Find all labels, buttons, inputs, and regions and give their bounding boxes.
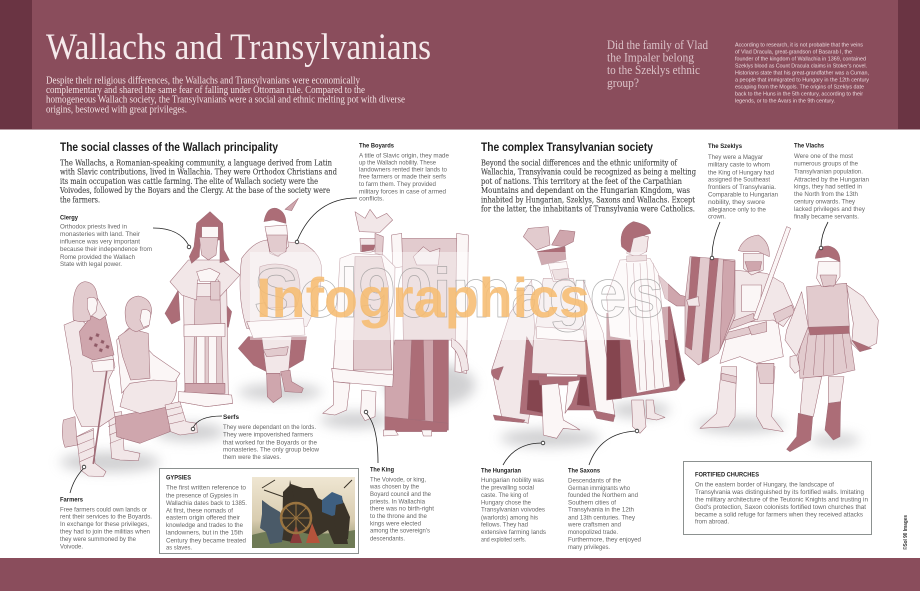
label: The King: descendants. <box>370 535 405 542</box>
label: The Szeklys: allegiance only to the <box>708 206 766 213</box>
Transylvanian paragraph: pot of nations. This territory at the feet of the Carpathian <box>481 176 682 186</box>
label: Clergy: State with legal power. <box>60 261 122 268</box>
Wallach paragraph: with Slavic contributions, lived in Wallachia. They were Orthodox Christians and <box>60 166 338 176</box>
label: The Vlachs: finally became servants. <box>794 213 859 220</box>
question: to the Szeklys ethnic <box>607 62 700 77</box>
Gypsies engraving <box>252 477 355 548</box>
label: Serfs: They were impoverished farmers <box>223 432 313 439</box>
leader: King <box>364 410 378 463</box>
leader: Hungarian <box>503 441 545 465</box>
label: The Saxons: many privileges. <box>568 544 610 551</box>
answer text: a people that immigrated to Hungary in the 12th century <box>735 78 869 84</box>
panel: Transylvanian heading: The complex Transylvanian society <box>481 140 653 154</box>
label: Farmers: Farmers <box>60 497 83 504</box>
header band <box>0 0 920 130</box>
label: The Boyards: A title of Slavic origin, they made <box>359 152 449 159</box>
intro text: origins, bestowed with great privileges. <box>46 104 187 115</box>
Transylvanian paragraph: for the latter, the inhabitants of Transylvania were Catholics. <box>481 204 695 214</box>
label: Serfs <box>223 414 319 461</box>
label: The Saxons: monopolized trade. <box>568 529 618 536</box>
label: The Saxons: Transylvania in the 12th <box>568 507 634 514</box>
label: The Boyards: up the Wallach nobility. These <box>359 159 436 166</box>
label: The Boyards: to farm them. They provided <box>359 181 436 188</box>
label: The Hungarian: fellows. They had <box>481 522 528 529</box>
label: The Boyards: conflicts. <box>359 196 384 203</box>
label: The Szeklys: Comparable to Hungarian <box>708 192 778 199</box>
figure: bishop <box>165 212 240 407</box>
Fortified churches text: Transylvania was distinguished by its fortified walls. Imitating <box>695 489 864 496</box>
label: Farmers <box>60 497 152 550</box>
Fortified churches text <box>695 481 868 525</box>
Wallach paragraph: the farmers. <box>60 194 100 204</box>
Gypsies text: Century they became treated <box>166 537 246 544</box>
label: The Saxons: Descendants of the <box>568 477 621 484</box>
label: Clergy: monasteries with land. Their <box>60 231 140 238</box>
label: The Boyards <box>359 142 449 203</box>
label: The Hungarian: Transylvanian voivodes <box>481 507 545 514</box>
Transylvanian paragraph: Wallachia, Transylvania could be recognized as being a melting <box>481 166 697 176</box>
Fortified churches heading: FORTIFIED CHURCHES <box>695 471 760 478</box>
leader: Serfs <box>191 416 222 431</box>
Wallach paragraph: its main occupation was cattle farming. The elite of Wallach society were the <box>60 176 318 186</box>
label: Clergy: Clergy <box>60 214 78 222</box>
label: The Hungarian: extensive farming lands <box>481 529 546 536</box>
credit: ©Sol 90 Images <box>902 515 909 550</box>
answer text: According to research, it is not probable that the veins <box>735 42 863 48</box>
label: The Boyards: The Boyards <box>359 142 394 150</box>
intro text: complementary and shared the same fear of falling under Ottoman rule. Compared to the <box>46 85 365 96</box>
Gypsies text: landowners, but in the 15th <box>166 530 243 537</box>
label: The Boyards: landowners rented their lands to <box>359 166 447 173</box>
label: The Vlachs: kings, they had settled in <box>794 184 862 191</box>
label: The King: Boyard council and the <box>370 491 431 498</box>
label: The Saxons: Furthermore, they enjoyed <box>568 537 641 544</box>
label: The Hungarian: Hungary chose the <box>481 499 531 506</box>
figure: boyard <box>238 198 322 403</box>
ground shadows <box>60 363 860 472</box>
label: The Hungarian: the prevailing social <box>481 485 534 492</box>
label: The Szeklys: The Szeklys <box>708 143 742 150</box>
label: The Boyards: military forces in case of armed <box>359 189 446 196</box>
label: The King: among the sovereign's <box>370 528 430 535</box>
Fortified churches text: the military architecture of the Teutonic Knights and trusting in <box>695 496 868 503</box>
leader: Boyards <box>295 198 357 244</box>
leader: Saxons <box>589 429 639 465</box>
label: The Szeklys: nobility, they swore <box>708 199 766 206</box>
panel: Wallach heading: The social classes of the Wallach principality <box>60 140 278 154</box>
label: Clergy: Rome provided the Wallach <box>60 254 135 261</box>
Fortified churches text: God's protection, Saxon colonists fortified town churches that <box>695 504 866 511</box>
Fortified churches text: On the eastern border of Hungary, the landscape of <box>695 481 834 488</box>
figure: king and throne <box>323 209 468 436</box>
Gypsies text: as slaves. <box>166 545 192 552</box>
label: Farmers: they had to join the militias when <box>60 529 150 536</box>
label: Clergy: influence was very important <box>60 238 140 245</box>
question <box>607 37 708 90</box>
answer text: back to the Huns in the 5th century, according to their <box>735 92 863 98</box>
answer text: legends, or to the Avars in the 9th century. <box>735 99 835 105</box>
label: The Vlachs <box>794 143 869 220</box>
Fortified churches text: from abroad. <box>695 518 729 525</box>
leader: Farmers <box>70 465 86 493</box>
panel: Fortified churches <box>684 462 872 534</box>
label: The Vlachs: Were one of the most <box>794 153 853 160</box>
label: The Vlachs: the North from the 13th <box>794 191 858 198</box>
label: Farmers: they were summoned by the <box>60 536 136 543</box>
label: Clergy <box>60 214 152 268</box>
washed watermark strip <box>250 252 668 340</box>
label: The Szeklys: frontiers of Transylvania. <box>708 184 776 191</box>
label: The Hungarian: caste. The king of <box>481 492 528 499</box>
label: The Hungarian: (warlords) among his <box>481 514 538 521</box>
label: The Saxons: and 13th centuries. They <box>568 514 636 521</box>
Transylvanian paragraph <box>481 158 697 214</box>
answer text <box>735 42 869 105</box>
label: The Szeklys: assigned the Southeast <box>708 177 770 184</box>
label: The Saxons: founded the Northern and <box>568 492 638 499</box>
Gypsies text: Wallachia dates back to 1385. <box>166 500 247 507</box>
label: Serfs: Serfs <box>223 414 239 421</box>
footer band <box>0 558 920 591</box>
Fortified churches text: became a solid refuge for farmers when they received attacks <box>695 511 863 518</box>
label: Farmers: rent their services to the Boyards. <box>60 514 152 521</box>
answer text: Historians state that his great-grandfather was a Cuman, <box>735 70 869 76</box>
watermark: Infographics: Infographics <box>256 266 590 329</box>
figure: szekly soldier with shield <box>685 227 795 432</box>
label: Farmers: In exchange for these privileges, <box>60 521 149 528</box>
label: The King: priests. In Wallachia <box>370 498 425 505</box>
panel: Gypsies <box>160 468 358 554</box>
label: The Szeklys: crown. <box>708 214 726 221</box>
label: Farmers: Free farmers could own lands or <box>60 506 147 513</box>
question: group? <box>607 75 639 90</box>
title: Wallachs and Transylvanians <box>46 27 431 68</box>
label: The King: was chosen by the <box>369 483 419 490</box>
Transylvanian paragraph: Mountains and dependant on the Hungarian Kingdom, was <box>481 185 690 195</box>
answer text: of Vlad Dracula, great-grandson of Basarab I, the <box>735 49 852 55</box>
label: The Saxons: The Saxons <box>568 467 600 474</box>
label: The Vlachs: Attracted by the Hungarian <box>794 176 869 183</box>
label: Farmers: Voivode. <box>60 543 83 550</box>
Transylvanian paragraph: inhabited by Hungarian, Szeklys, Saxons and Wallachs. Except <box>481 194 695 204</box>
label: The King: to the throne and the <box>370 513 427 520</box>
label: Clergy: because their independence from <box>60 246 152 253</box>
label: The Szeklys <box>708 143 778 221</box>
Wallach paragraph: Voivodes, followed by the Boyars and the Clergy. At the base of the society were <box>59 185 330 195</box>
label: The King: kings were elected <box>370 520 421 527</box>
Wallach paragraph: The Wallachs, a Romanian-speaking community, a language derived from Latin <box>60 158 332 168</box>
label: The Vlachs: The Vlachs <box>794 143 824 150</box>
label: The Vlachs: century onwards. They <box>794 198 856 205</box>
label: The Szeklys: the King of Hungary had <box>708 169 774 176</box>
label: Serfs: that worked for the Boyards or the <box>223 440 317 447</box>
label: Serfs: them were the slaves. <box>223 454 281 461</box>
label: The Hungarian: and exploited serfs. <box>481 537 526 544</box>
label: The Saxons: were craftsmen and <box>567 522 621 529</box>
label: The Boyards: free farmers or made their serfs <box>359 174 446 181</box>
intro text <box>46 76 405 115</box>
Gypsies text: At first, these nomads of <box>166 507 233 514</box>
leader: Clergy <box>153 228 191 249</box>
label: The Vlachs: Transylvanian population. <box>794 169 863 176</box>
figure: saxon <box>607 222 698 433</box>
question: the Impaler belong <box>607 50 694 64</box>
intro text: homogeneous Wallach society, the Transylvanians were a social and ethnic melting pot with diverse <box>46 95 405 106</box>
figure: serf <box>115 296 197 443</box>
label: The King: The King <box>370 466 394 473</box>
label: The Szeklys: They were a Magyar <box>708 154 763 161</box>
answer text: founder of the kingdom of Wallachia in 1369, contained <box>735 56 866 62</box>
label: The King: The Voivode, or king, <box>370 476 426 483</box>
figure: hungarian <box>491 227 615 438</box>
figure: farmer <box>62 282 140 477</box>
label: The Vlachs: lacked privileges and they <box>794 206 866 213</box>
Gypsies text: eastern origin offered their <box>166 515 240 522</box>
leader: Vlachs <box>819 222 828 250</box>
Gypsies text <box>166 485 247 552</box>
answer text: escaping from the Mogols. The origins of Szeklys date <box>735 85 864 91</box>
label: The Saxons <box>567 467 641 551</box>
figure: vlach <box>785 246 878 452</box>
question: Did the family of Vlad <box>607 37 708 52</box>
label: The King <box>369 466 434 542</box>
label: The Hungarian <box>481 467 546 544</box>
label: Serfs: They were dependant on the lords. <box>223 424 316 431</box>
Wallach paragraph <box>59 158 338 204</box>
label: The Vlachs: numerous groups of the <box>794 161 858 168</box>
Gypsies text: The first written reference to <box>166 485 246 492</box>
Gypsies text: knowledge and trades to the <box>166 522 243 529</box>
label: The Saxons: Southern cities of <box>568 499 616 506</box>
watermark: Sol 90 images outline: Sol90images <box>254 254 664 332</box>
intro text: Despite their religious differences, the Wallachs and Transylvanians were economically <box>46 76 360 86</box>
leader: Szeklys <box>710 222 720 260</box>
label: The Saxons: German immigrants who <box>568 485 630 492</box>
label: The Szeklys: military caste to whom <box>708 162 770 169</box>
answer text: Szeklys blood as Count Dracula claims in Stoker's novel. <box>735 64 867 70</box>
label: The King: there was no birth-right <box>370 506 434 513</box>
label: Serfs: monasteries. The only group below <box>223 447 319 454</box>
label: The Hungarian: Hungarian nobility was <box>481 477 544 484</box>
Gypsies text: the presence of Gypsies in <box>166 492 238 499</box>
Gypsies heading: GYPSIES <box>166 474 192 482</box>
Transylvanian paragraph: Beyond the social differences and the ethnic uniformity of <box>481 158 678 168</box>
label: The Hungarian: The Hungarian <box>481 467 521 474</box>
label: Clergy: Orthodox priests lived in <box>60 223 127 230</box>
